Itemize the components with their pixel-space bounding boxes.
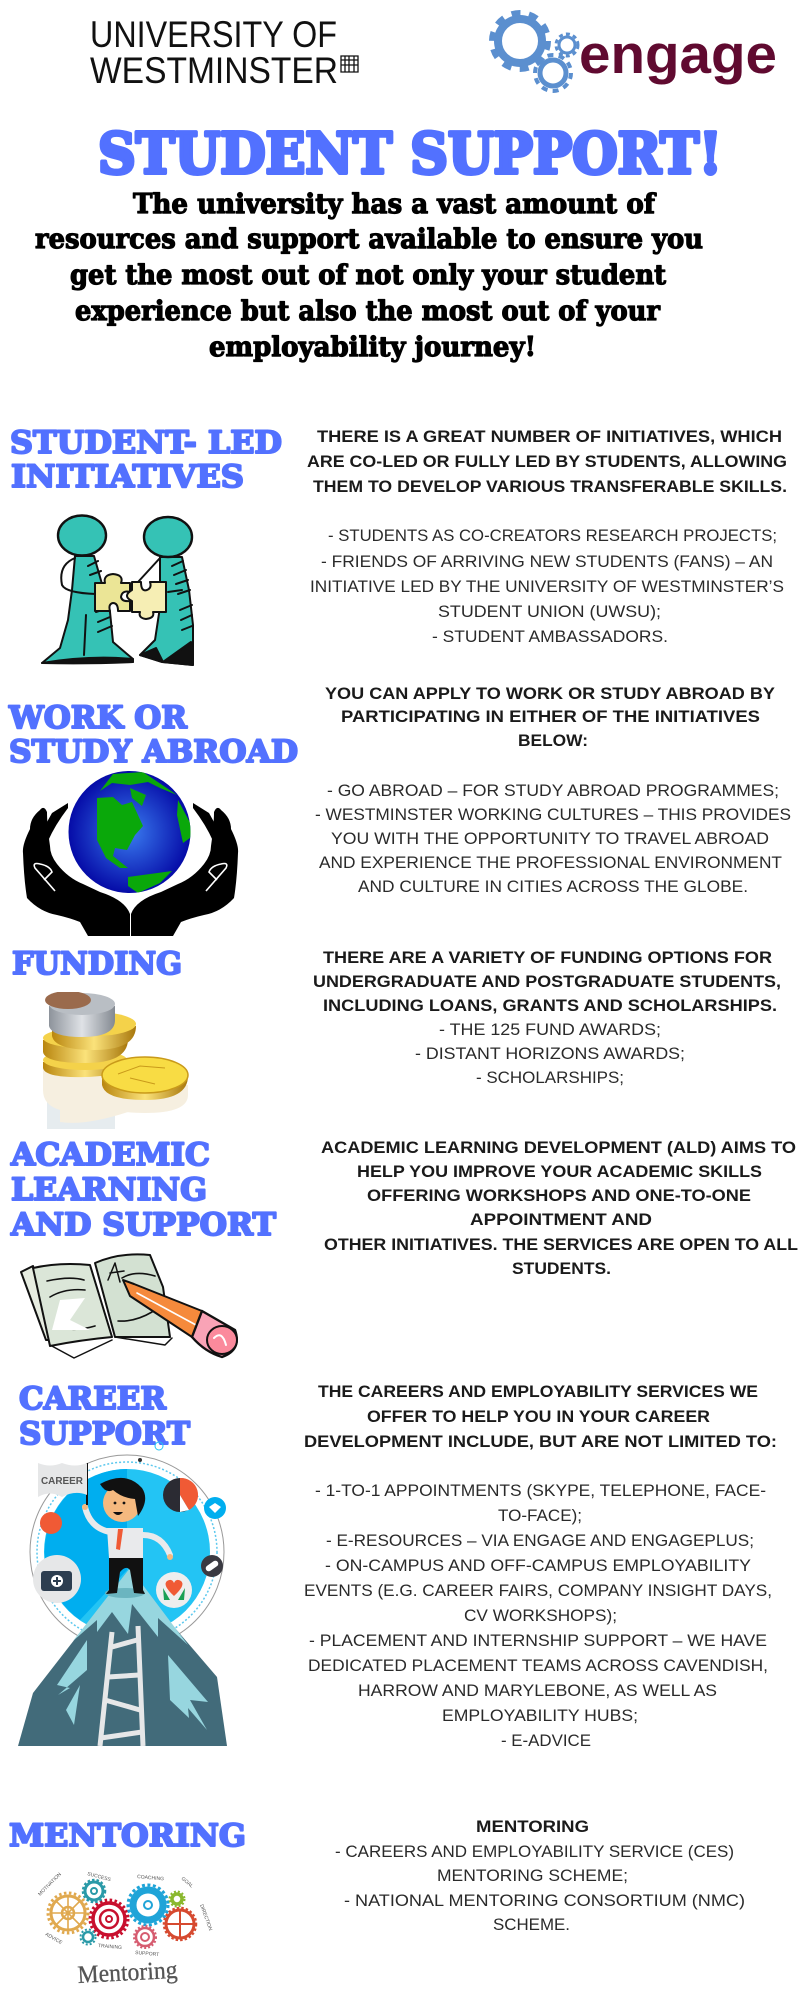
text block: funding: - THE 125 FUND AWARDS; [439, 1020, 661, 1039]
text block: student-led initiatives: STUDENT UNION (UWSU); [438, 602, 661, 621]
text block: funding: THERE ARE A VARIETY OF FUNDING OPTIONS FOR [323, 948, 772, 967]
panel: student-led initiatives [10, 425, 787, 665]
text block: career support: THE CAREERS AND EMPLOYABILITY SERVICES WE [318, 1382, 758, 1401]
icon: mentoring gears: SUPPORT [135, 1950, 159, 1958]
text block: academic learning: ACADEMIC LEARNING DEVELOPMENT (ALD) AIMS TO [321, 1138, 796, 1157]
text block: work or study abroad: BELOW: [518, 731, 588, 750]
text block: career support: - PLACEMENT AND INTERNSHIP SUPPORT – WE HAVE [309, 1631, 767, 1650]
text block: funding: - SCHOLARSHIPS; [476, 1068, 624, 1087]
heading: career support: SUPPORT [19, 1416, 190, 1452]
text block: work or study abroad: - WESTMINSTER WORKING CULTURES – THIS PROVIDES [315, 805, 791, 824]
icon: man on mountain with career flag [18, 1442, 227, 1746]
text block: mentoring: MENTORING [476, 1817, 589, 1836]
intro text: The university has a vast amount of [133, 189, 657, 220]
text block: career support: - E-RESOURCES – VIA ENGAGE AND ENGAGEPLUS; [326, 1531, 754, 1550]
icon: man on mountain with career flag: CAREER [41, 1476, 84, 1487]
intro text: get the most out of not only your student [70, 260, 667, 291]
icon: mentoring gears: MOTIVATION [37, 1871, 63, 1897]
heading: mentoring: MENTORING [9, 1818, 246, 1854]
text block: mentoring: MENTORING SCHEME; [437, 1866, 628, 1885]
icon: two figures joining puzzle pieces [42, 516, 193, 665]
text block: student-led initiatives [307, 427, 787, 646]
text block: career support: OFFER TO HELP YOU IN YOUR CAREER [367, 1407, 710, 1426]
icon: mentoring gears: DIRECTION [198, 1904, 213, 1932]
text block: work or study abroad: YOU WITH THE OPPORTUNITY TO TRAVEL ABROAD [331, 829, 769, 848]
icon: globe held by hands [23, 771, 238, 936]
heading: career support: CAREER [19, 1381, 166, 1417]
text block: career support: - E-ADVICE [501, 1731, 591, 1750]
heading: work or study abroad: WORK OR [8, 700, 187, 736]
text block: work or study abroad: AND CULTURE IN CITIES ACROSS THE GLOBE. [358, 877, 748, 896]
text block: funding [313, 948, 781, 1087]
logo: engage with gears: engage [579, 23, 777, 85]
text block: career support: HARROW AND MARYLEBONE, AS WELL AS [358, 1681, 717, 1700]
text block: career support: DEVELOPMENT INCLUDE, BUT ARE NOT LIMITED TO: [304, 1432, 777, 1451]
text block: career support: CV WORKSHOPS); [464, 1606, 617, 1625]
heading: funding: FUNDING [12, 946, 182, 982]
text block: mentoring: - CAREERS AND EMPLOYABILITY SERVICE (CES) [335, 1842, 734, 1861]
text block: career support: TO-FACE); [498, 1506, 582, 1525]
intro text: experience but also the most out of your [75, 296, 661, 327]
text block: funding: - DISTANT HORIZONS AWARDS; [415, 1044, 685, 1063]
text block: student-led initiatives: - FRIENDS OF ARRIVING NEW STUDENTS (FANS) – AN [321, 552, 773, 571]
heading: academic learning and support [10, 1137, 276, 1243]
text block: student-led initiatives: THERE IS A GREAT NUMBER OF INITIATIVES, WHICH [317, 427, 782, 446]
icon: open book and pencil [21, 1254, 237, 1358]
icon: mentoring gears: GOAL [180, 1876, 194, 1890]
heading: academic learning and support: LEARNING [11, 1172, 207, 1208]
text block: work or study abroad [315, 684, 791, 896]
text block: work or study abroad: - GO ABROAD – FOR STUDY ABROAD PROGRAMMES; [327, 781, 779, 800]
text block: career support: DEDICATED PLACEMENT TEAMS ACROSS CAVENDISH, [308, 1656, 768, 1675]
logo: University of Westminster [90, 14, 358, 91]
text block: student-led initiatives: - STUDENT AMBASSADORS. [432, 627, 668, 646]
logo: engage with gears [492, 13, 777, 91]
text block: mentoring: - NATIONAL MENTORING CONSORTIUM (NMC) [344, 1891, 745, 1910]
heading: work or study abroad [8, 700, 298, 770]
logo: University of Westminster: UNIVERSITY OF [90, 14, 337, 55]
text block: academic learning: OTHER INITIATIVES. THE SERVICES ARE OPEN TO ALL [324, 1235, 798, 1254]
icon: stack of coins [43, 991, 188, 1129]
panel: career support [18, 1381, 777, 1750]
text block: work or study abroad: YOU CAN APPLY TO WORK OR STUDY ABROAD BY [325, 684, 776, 703]
heading: student-led initiatives [10, 425, 282, 495]
icon: mentoring gears: TRAINING [98, 1943, 122, 1951]
heading: academic learning and support: AND SUPPORT [10, 1207, 276, 1243]
icon: mentoring gears [37, 1871, 213, 1989]
text block: work or study abroad: AND EXPERIENCE THE PROFESSIONAL ENVIRONMENT [319, 853, 782, 872]
title: STUDENT SUPPORT! [98, 121, 722, 187]
text block: career support [304, 1382, 777, 1750]
text block: career support: - 1-TO-1 APPOINTMENTS (SKYPE, TELEPHONE, FACE- [315, 1481, 766, 1500]
text block: academic learning: APPOINTMENT AND [470, 1210, 652, 1229]
text block: student-led initiatives: ARE CO-LED OR FULLY LED BY STUDENTS, ALLOWING [307, 452, 787, 471]
icon: mentoring gears: COACHING [137, 1874, 164, 1882]
text block: career support: EMPLOYABILITY HUBS; [442, 1706, 638, 1725]
text block: work or study abroad: PARTICIPATING IN EITHER OF THE INITIATIVES [341, 707, 760, 726]
icon: mentoring gears: ADVICE [44, 1932, 64, 1946]
text block: mentoring [335, 1817, 745, 1934]
text block: career support: EVENTS (E.G. CAREER FAIRS, COMPANY INSIGHT DAYS, [304, 1581, 772, 1600]
heading: work or study abroad: STUDY ABROAD [9, 734, 298, 770]
text block: career support: - ON-CAMPUS AND OFF-CAMPUS EMPLOYABILITY [325, 1556, 751, 1575]
text block: student-led initiatives: - STUDENTS AS CO-CREATORS RESEARCH PROJECTS; [328, 526, 777, 545]
heading: student-led initiatives: INITIATIVES [11, 459, 244, 495]
text block: academic learning [321, 1138, 798, 1278]
intro text: resources and support available to ensure you [35, 224, 703, 255]
heading: career support [19, 1381, 190, 1452]
panel: work or study abroad [8, 684, 791, 936]
text block: academic learning: HELP YOU IMPROVE YOUR ACADEMIC SKILLS [357, 1162, 762, 1181]
text block: student-led initiatives: THEM TO DEVELOP VARIOUS TRANSFERABLE SKILLS. [313, 477, 787, 496]
panel: academic learning and support [10, 1137, 798, 1358]
text block: student-led initiatives: INITIATIVE LED BY THE UNIVERSITY OF WESTMINSTER’S [310, 577, 784, 596]
intro text: employability journey! [209, 332, 536, 363]
text block: academic learning: OFFERING WORKSHOPS AND ONE-TO-ONE [367, 1186, 751, 1205]
logo: University of Westminster: WESTMINSTER [90, 50, 338, 91]
text block: funding: UNDERGRADUATE AND POSTGRADUATE STUDENTS, [313, 972, 781, 991]
text block: funding: INCLUDING LOANS, GRANTS AND SCHOLARSHIPS. [323, 996, 777, 1015]
icon: mentoring gears: Mentoring [77, 1957, 179, 1989]
icon: mentoring gears: SUCCESS [86, 1871, 112, 1883]
text block: academic learning: STUDENTS. [512, 1259, 611, 1278]
intro text [35, 189, 703, 363]
panel: mentoring [9, 1817, 745, 1989]
panel: funding [12, 946, 781, 1129]
text block: mentoring: SCHEME. [493, 1915, 570, 1934]
heading: student-led initiatives: STUDENT- LED [10, 425, 282, 461]
heading: academic learning and support: ACADEMIC [10, 1137, 210, 1173]
